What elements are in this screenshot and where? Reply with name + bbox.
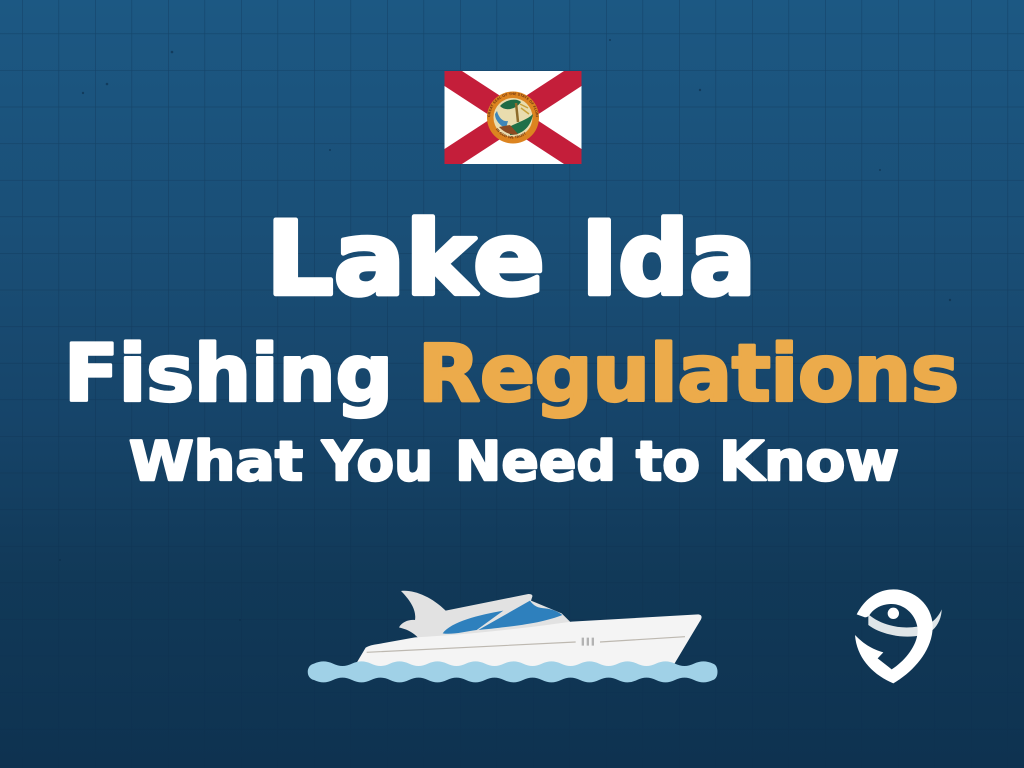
subheading: What You Need to Know: to	[636, 430, 700, 493]
icon: Florida state flag: GREAT SEAL OF THE STATE OF FLORIDA	[488, 92, 538, 117]
hull	[353, 614, 702, 668]
water waves	[308, 661, 717, 682]
boat cabin and radar arch	[399, 591, 571, 640]
icon: fish hook logo	[855, 589, 942, 683]
title: Lake Ida	[266, 200, 756, 319]
icon: Florida state flag: IN GOD WE TRUST	[496, 128, 526, 138]
side window	[443, 611, 503, 634]
subheading: What You Need to Know: Know	[719, 430, 899, 493]
windshield	[478, 601, 562, 630]
title: Lake Ida: Ida	[581, 200, 756, 319]
logo band	[868, 609, 942, 637]
logo eye	[888, 608, 899, 619]
icon: Florida state flag	[444, 71, 582, 164]
heading: Fishing Regulations: Fishing	[64, 330, 393, 420]
subheading: What You Need to Know	[129, 430, 899, 493]
title: Lake Ida: Lake	[266, 200, 545, 319]
subheading: What You Need to Know: Need	[455, 430, 616, 493]
subheading: What You Need to Know: You	[321, 430, 433, 493]
icon: boat on water	[308, 591, 717, 682]
hull stripe and vents	[367, 637, 685, 652]
heading: Fishing Regulations	[64, 330, 959, 420]
logo body	[855, 589, 933, 683]
heading: Fishing Regulations: Regulations	[418, 330, 959, 420]
subheading: What You Need to Know: What	[129, 430, 303, 493]
